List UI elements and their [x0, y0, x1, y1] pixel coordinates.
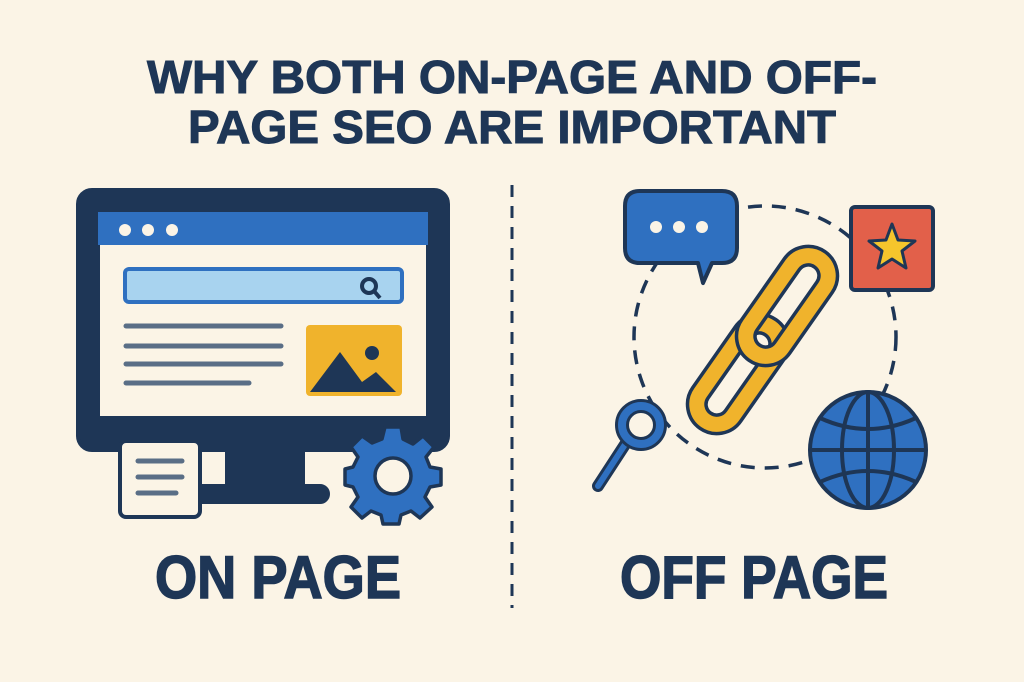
text lines	[126, 326, 281, 383]
title: PAGE SEO ARE IMPORTANT	[188, 101, 836, 153]
icon: globe	[810, 392, 926, 508]
dashed circle	[634, 206, 896, 468]
illustration: monitor	[78, 190, 448, 502]
icon: magnifier	[598, 406, 660, 486]
divider	[510, 185, 514, 608]
icon: document	[120, 441, 200, 517]
label: on page: ON PAGE	[155, 544, 401, 611]
title: WHY BOTH ON-PAGE AND OFF-	[147, 51, 877, 103]
icon: chain link	[689, 248, 836, 432]
icon: gear	[345, 427, 441, 524]
search bar	[125, 269, 402, 302]
icon: chat bubble	[625, 191, 737, 283]
image icon	[306, 325, 402, 396]
icon: star box	[851, 207, 933, 290]
title	[147, 51, 877, 153]
label: off page: OFF PAGE	[620, 544, 888, 611]
